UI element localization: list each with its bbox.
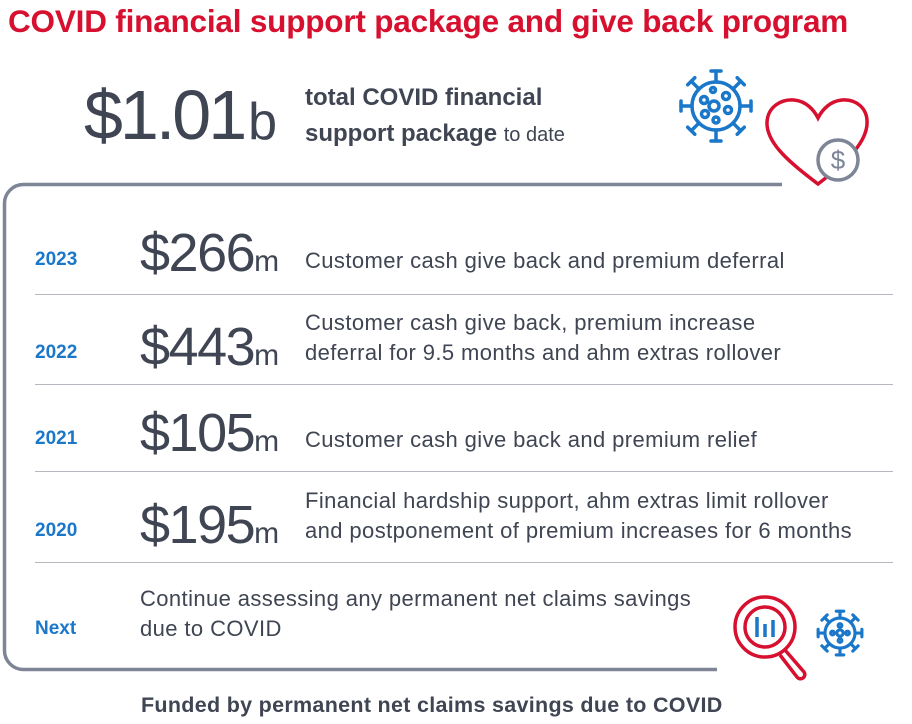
row 2023: $266m xyxy=(140,223,279,283)
row 2023: 2023 xyxy=(35,249,77,270)
icon: heart with dollar: $ xyxy=(831,145,846,175)
row 2022 xyxy=(35,310,781,377)
footer note: Funded by permanent net claims savings due to COVID xyxy=(141,693,723,717)
row 2021: Customer cash give back and premium relief xyxy=(305,427,757,452)
icon: virus top xyxy=(679,69,753,143)
row 2022: deferral for 9.5 months and ahm extras rollover xyxy=(305,340,781,365)
row 2022: $443m xyxy=(140,317,279,377)
row 2022: Customer cash give back, premium increase xyxy=(305,310,755,335)
row 2021: 2021 xyxy=(35,428,77,449)
row 2020: Financial hardship support, ahm extras limit rollover xyxy=(305,488,829,513)
row 2020: $195m xyxy=(140,495,279,555)
icon: magnifier xyxy=(733,595,807,680)
row 2020: 2020 xyxy=(35,520,77,541)
title: COVID financial support package and give back program xyxy=(8,3,848,39)
row next: due to COVID xyxy=(140,616,282,641)
row 2021: $105m xyxy=(140,403,279,463)
row next xyxy=(35,586,691,641)
total label xyxy=(305,84,565,147)
icon: heart with dollar xyxy=(765,98,869,186)
total label: support package to date xyxy=(305,120,565,147)
row 2020: and postponement of premium increases for 6 months xyxy=(305,518,852,543)
row 2020 xyxy=(35,488,852,555)
row next: Next xyxy=(35,618,76,639)
row 2022: 2022 xyxy=(35,342,77,363)
row 2023: Customer cash give back and premium deferral xyxy=(305,248,785,273)
row 2023 xyxy=(35,223,785,283)
total label: total COVID financial xyxy=(305,84,542,111)
total amount: $1.01b xyxy=(84,76,277,154)
headline total xyxy=(84,76,565,154)
row 2021 xyxy=(35,403,757,463)
icon: virus bottom xyxy=(816,610,864,656)
row next: Continue assessing any permanent net claims savings xyxy=(140,586,691,611)
